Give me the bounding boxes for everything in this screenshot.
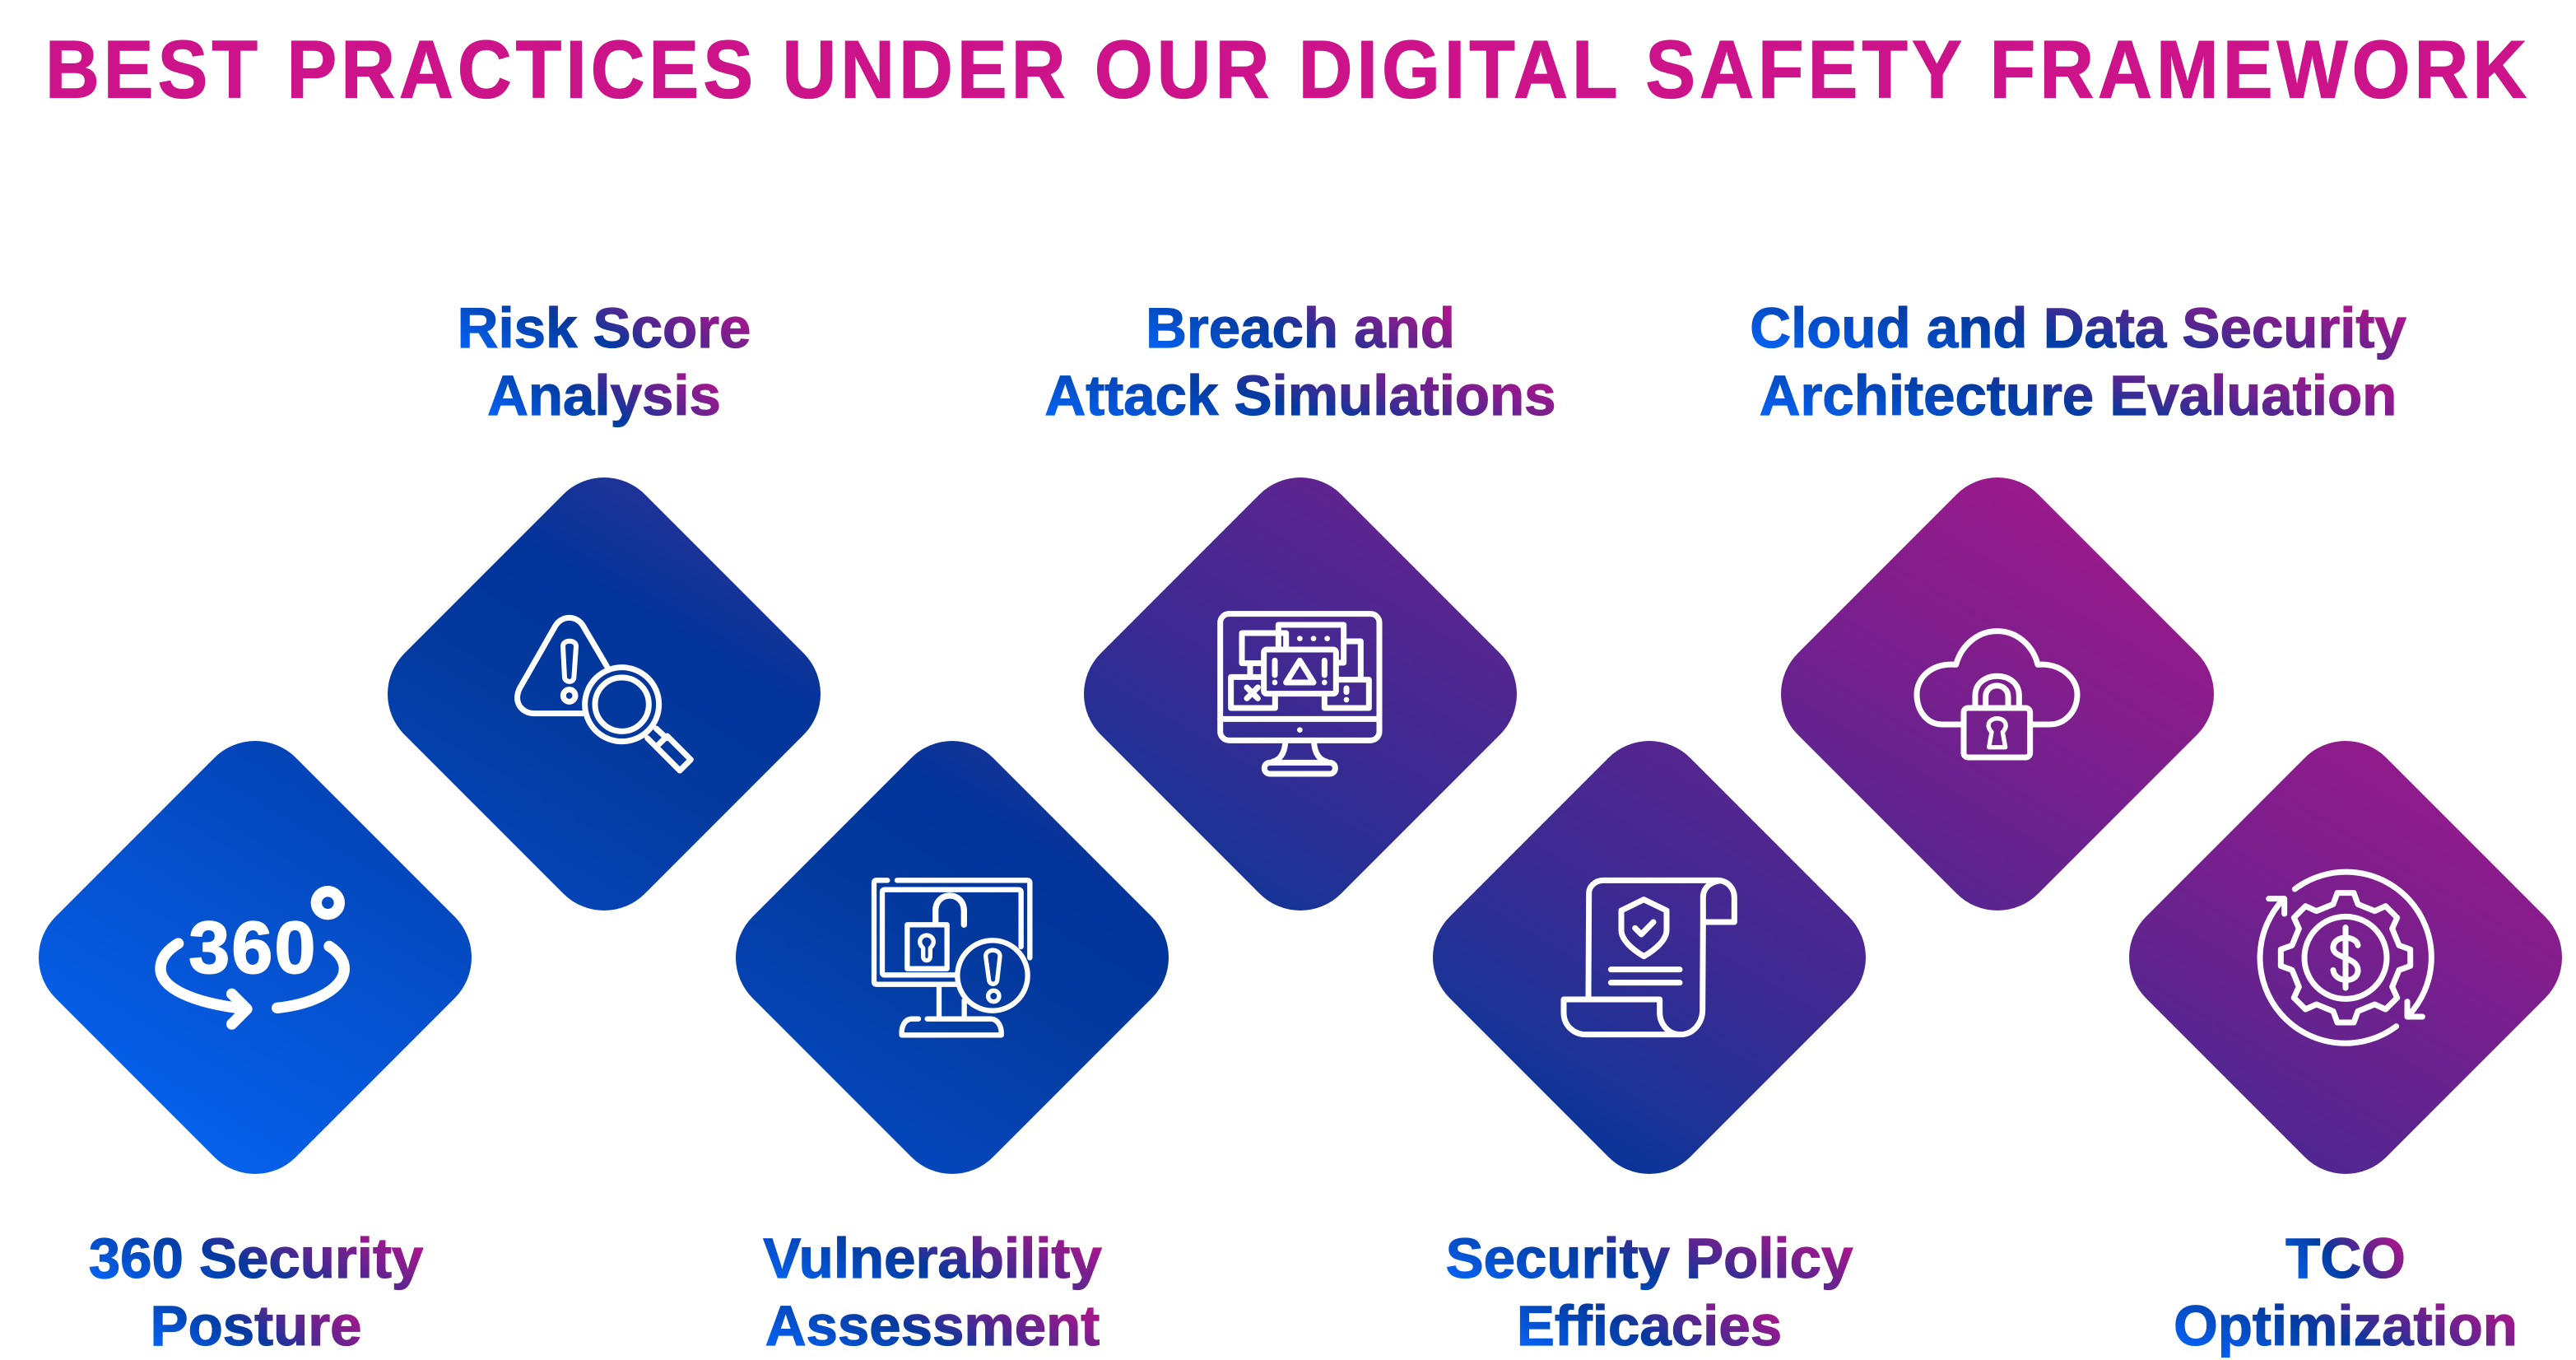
diamond: TCO optimization — [2129, 741, 2562, 1174]
panel: TCO Optimization — [2129, 741, 2562, 1358]
diamond: breach and attack simulations — [1084, 477, 1517, 911]
icon: policy scroll with shield — [1564, 880, 1734, 1035]
label: Breach and Attack Simulations: Breach and — [1146, 296, 1455, 360]
icon: gear with dollar and cycle arrows — [2260, 872, 2431, 1043]
diamond: risk score analysis — [388, 477, 821, 911]
panel: Vulnerability Assessment — [736, 741, 1169, 1358]
icon: warning triangle with magnifier — [518, 617, 690, 771]
label: Vulnerability Assessment: Vulnerability — [763, 1227, 1102, 1290]
label: Vulnerability Assessment — [763, 1227, 1102, 1358]
label: Vulnerability Assessment: Assessment — [765, 1294, 1100, 1358]
label: Security Policy Efficacies: Efficacies — [1517, 1294, 1782, 1358]
label: Cloud and Data Security Architecture Evaluation: Architecture Evaluation — [1760, 364, 2397, 427]
label: Security Policy Efficacies: Security Policy — [1446, 1227, 1853, 1290]
panel: Risk Score Analysis — [388, 296, 821, 911]
diamond: 360 security posture — [39, 741, 472, 1174]
diamond: vulnerability assessment — [736, 741, 1169, 1174]
label: Risk Score Analysis — [458, 296, 751, 427]
icon: cloud with padlock — [1917, 631, 2077, 757]
panel: Breach and Attack Simulations — [1044, 296, 1556, 911]
panel: 360 Security Posture — [39, 741, 472, 1358]
panel: Cloud and Data Security Architecture Evaluation — [1750, 296, 2406, 911]
label: 360 Security Posture: 360 Security — [89, 1227, 423, 1290]
label: 360 Security Posture: Posture — [151, 1294, 361, 1358]
icon: 360 degree rotation — [160, 892, 344, 1024]
icon: monitor with alert windows — [1221, 614, 1379, 774]
label: 360 Security Posture — [89, 1227, 423, 1358]
title: BEST PRACTICES UNDER OUR DIGITAL SAFETY FRAMEWORK — [45, 25, 2527, 115]
label: TCO Optimization: TCO — [2285, 1227, 2406, 1290]
label: TCO Optimization: Optimization — [2174, 1294, 2518, 1358]
panel: Security Policy Efficacies — [1433, 741, 1866, 1358]
diamond: security policy efficacies — [1433, 741, 1866, 1174]
icon: monitor with open lock and alert — [874, 880, 1030, 1035]
label: Cloud and Data Security Architecture Evaluation: Cloud and Data Security — [1750, 296, 2406, 360]
label: Security Policy Efficacies — [1446, 1227, 1853, 1358]
label: Breach and Attack Simulations: Attack Simulations — [1044, 364, 1556, 427]
icon: 360 degree rotation: 360 — [188, 906, 315, 988]
label: TCO Optimization — [2174, 1227, 2518, 1358]
diamond: cloud and data security — [1781, 477, 2214, 911]
label: Cloud and Data Security Architecture Evaluation — [1750, 296, 2406, 427]
label: Risk Score Analysis: Analysis — [487, 364, 721, 427]
label: Risk Score Analysis: Risk Score — [458, 296, 751, 360]
label: Breach and Attack Simulations — [1044, 296, 1556, 427]
